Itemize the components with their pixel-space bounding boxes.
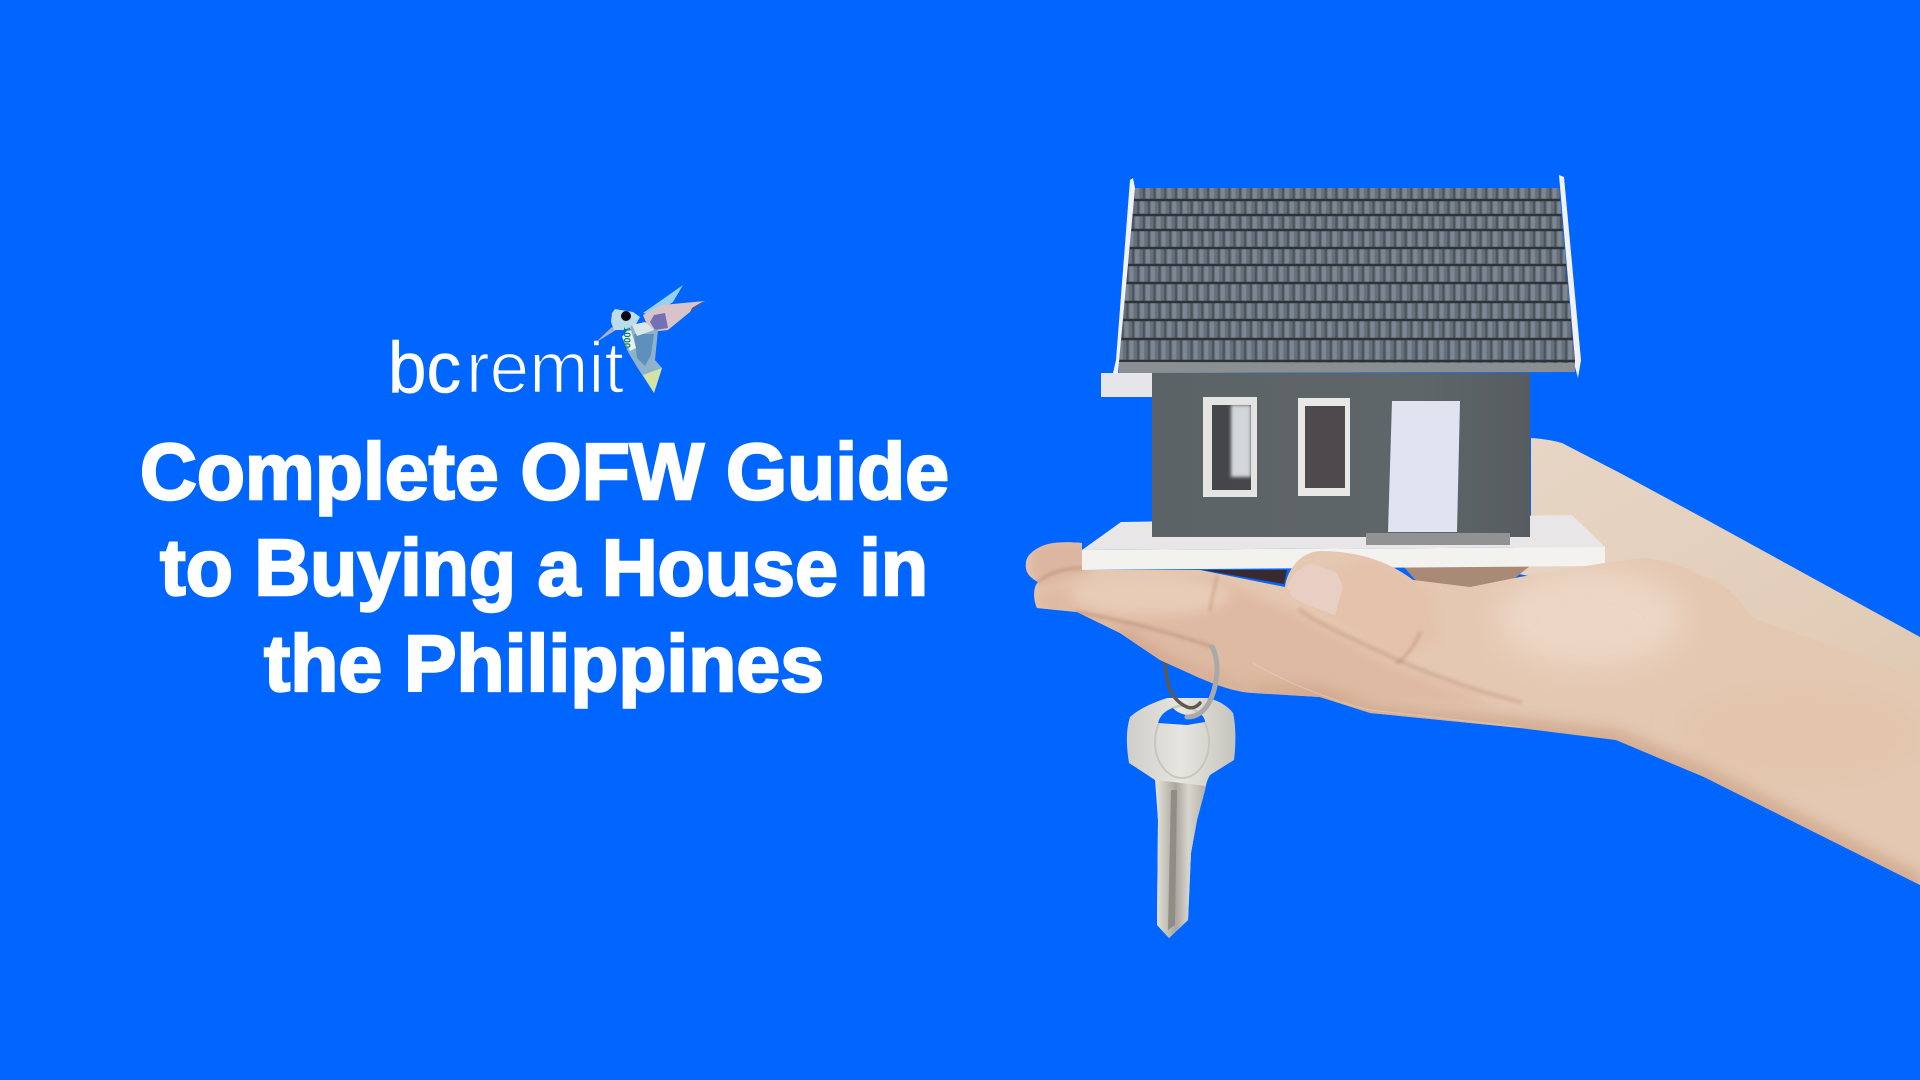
title xyxy=(140,427,949,708)
door xyxy=(1388,401,1460,532)
left window xyxy=(1203,397,1257,497)
house base board xyxy=(1082,515,1605,570)
hand shading xyxy=(1030,540,1920,885)
logo wordmark: remit xyxy=(466,328,624,408)
house xyxy=(1100,175,1590,545)
infographic canvas xyxy=(142,175,1920,938)
thumb nail xyxy=(1287,563,1343,615)
key xyxy=(1127,698,1235,938)
title line 1: Complete OFW Guide xyxy=(140,427,949,516)
title line 3: the Philippines xyxy=(264,619,824,708)
middle window xyxy=(1298,398,1350,496)
eave block xyxy=(1101,373,1152,397)
house wall xyxy=(1152,373,1530,537)
palm shadow under the board xyxy=(1403,566,1530,590)
key ring: front strand xyxy=(1187,647,1217,717)
front step xyxy=(1366,533,1510,545)
title line 2: to Buying a House in xyxy=(160,523,928,612)
hand creases xyxy=(1038,568,1520,727)
left barge board xyxy=(1113,178,1135,373)
back arm xyxy=(1500,438,1920,690)
logo hummingbird icon xyxy=(595,285,705,393)
illustration: hand holding house and key xyxy=(1026,175,1920,938)
hand xyxy=(1026,540,1920,885)
banknote denomination: 1000 xyxy=(621,327,632,348)
roof fascia xyxy=(1119,362,1575,373)
logo wordmark xyxy=(388,328,624,408)
roof xyxy=(1100,175,1590,378)
dark gap under board xyxy=(1203,570,1287,584)
key ring: back strand xyxy=(1165,663,1200,708)
logo: bcremit xyxy=(388,285,705,408)
logo wordmark: bc xyxy=(388,328,461,408)
right barge board xyxy=(1559,175,1581,378)
